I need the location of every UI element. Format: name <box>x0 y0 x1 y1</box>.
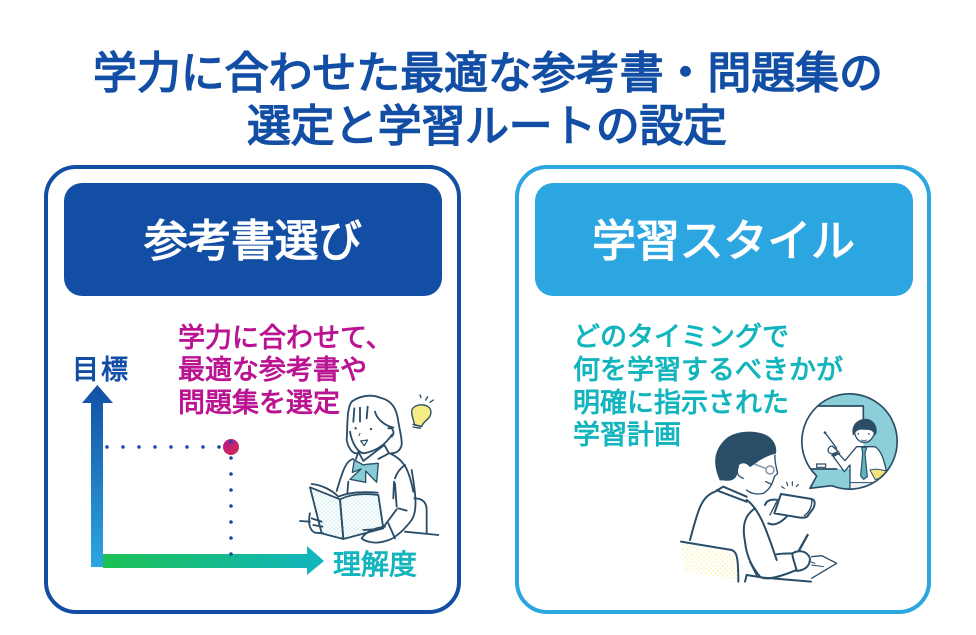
illustration: student with phone and speech bubble <box>681 394 897 582</box>
arrow: horizontal understanding axis <box>103 546 324 575</box>
heading: study style: 学習スタイル <box>592 217 855 266</box>
title: 選定と学習ルートの設定 <box>247 102 727 151</box>
panel: study style <box>517 167 929 612</box>
illustration: girl reading a book <box>300 395 438 543</box>
text block: textbook description: 学力に合わせて、 <box>178 323 393 353</box>
title: 学力に合わせた最適な参考書・問題集の <box>93 49 883 98</box>
text block: textbook description: 最適な参考書や <box>178 355 367 385</box>
text block: study style description <box>573 322 843 450</box>
text block: study style description: 何を学習するべきかが <box>573 355 843 385</box>
dotted guide lines <box>105 440 233 556</box>
heading: study style <box>535 183 913 296</box>
label: goal axis: 目標 <box>72 355 128 385</box>
target point <box>223 439 239 455</box>
open book and hands <box>300 470 438 543</box>
speech bubble with teacher <box>802 394 897 492</box>
girl's head and torso <box>337 395 433 498</box>
text block: study style description: 学習計画 <box>573 420 681 450</box>
panel: textbook selection <box>46 167 459 612</box>
label: understanding axis: 理解度 <box>333 549 417 580</box>
text block: study style description: どのタイミングで <box>573 322 789 352</box>
text block: study style description: 明確に指示された <box>573 388 789 418</box>
chart: goal and understanding axes <box>72 355 417 580</box>
text block: textbook description: 問題集を選定 <box>178 388 340 418</box>
arrow: vertical goal axis <box>82 385 113 567</box>
heading: textbook selection <box>64 183 442 296</box>
heading: textbook selection: 参考書選び <box>144 217 362 266</box>
man with phone and notebook <box>681 432 837 582</box>
text block: textbook description <box>178 323 393 418</box>
title <box>93 49 883 151</box>
